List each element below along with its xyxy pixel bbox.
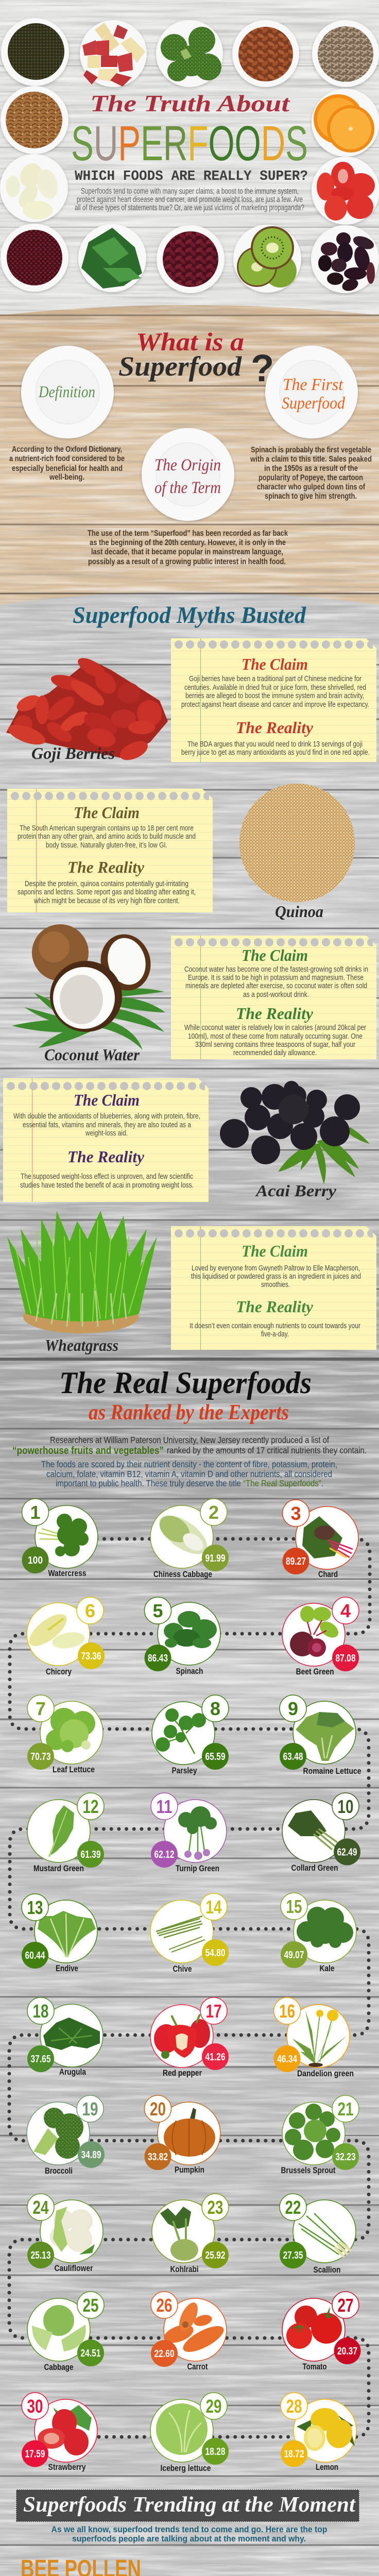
heading: What is a — [136, 327, 244, 356]
rank 8: parsley: Parsley — [172, 1766, 197, 1775]
heading: ? — [251, 347, 274, 389]
blue explanatory text — [41, 1459, 337, 1488]
rank 18: arugula: Arugula — [59, 2067, 86, 2077]
intro text: “powerhouse fruits and vegetables” — [12, 1445, 164, 1456]
bowl: orange slices — [312, 89, 379, 157]
heading — [118, 327, 274, 389]
rank 6: chicory — [24, 1597, 105, 1676]
rank 7: leaf lettuce: 7 — [36, 1698, 46, 1719]
food: turnip — [178, 1806, 217, 1860]
rank 24: cauliflower: 25.13 — [31, 2250, 50, 2261]
food: beet — [290, 1606, 341, 1657]
panel: hero — [0, 18, 379, 293]
rank 30: strawberry: 17.59 — [25, 2448, 45, 2460]
myth: goji berries — [6, 638, 376, 764]
rank 2: chinese cabbage — [150, 1499, 229, 1579]
rank 11: turnip green: 62.12 — [154, 1849, 174, 1860]
rank 11: turnip green: Turnip Green — [176, 1863, 219, 1873]
rank 19: broccoli — [27, 2095, 105, 2176]
rank 27: tomato: 27 — [338, 2295, 353, 2316]
rank 11: turnip green — [151, 1793, 227, 1873]
rank 22: scallion: 27.35 — [283, 2250, 303, 2261]
rank 22: scallion — [280, 2194, 356, 2275]
rank 21: brussels sprout: 32.23 — [336, 2151, 355, 2163]
note: acai claim and reality: With double the antioxidants of blueberries, along with protein, fibre, — [13, 1112, 200, 1121]
text: origin of the term — [88, 529, 288, 566]
intro text — [51, 2524, 328, 2544]
text: first superfood: spinach to give him strength. — [265, 492, 357, 501]
rank 29: iceberg lettuce: 18.28 — [205, 2446, 226, 2458]
rank 20: pumpkin — [144, 2095, 220, 2175]
food: kale — [297, 1907, 353, 1948]
rank 25: cabbage: 24.51 — [80, 2348, 101, 2359]
food: mustard leaf — [48, 1805, 74, 1857]
note: coconut claim and reality — [171, 936, 376, 1059]
heading: Superfood — [118, 351, 242, 382]
food: broccoli — [33, 2108, 83, 2159]
plate: origin of the term: The Origin — [154, 456, 221, 474]
subtitle: WHICH FOODS ARE REALLY SUPER? — [75, 169, 308, 184]
image: coconut — [12, 924, 165, 1050]
rank 3: chard — [282, 1500, 358, 1579]
note: acai claim and reality — [3, 1078, 209, 1202]
rank 8: parsley: 8 — [210, 1698, 220, 1719]
plate: origin of the term — [142, 428, 234, 521]
rank 30: strawberry — [22, 2393, 97, 2472]
rank 20: pumpkin: Pumpkin — [175, 2165, 204, 2175]
note: acai claim and reality: weight-loss aid. — [85, 1129, 128, 1138]
food: red pepper — [154, 2014, 210, 2059]
food: brussels sprouts — [285, 2104, 340, 2160]
myth: quinoa — [7, 784, 355, 921]
food: cabbage — [32, 2305, 86, 2351]
rank 1: watercress: 100 — [28, 1555, 43, 1566]
rank 6: chicory: Chicory — [46, 1667, 72, 1676]
rank 18: arugula: 37.65 — [31, 2054, 50, 2065]
panel: superfoods trending — [5, 2489, 373, 2576]
text: origin of the term: as the beginning of the 20th century. However, it is only in the — [90, 538, 286, 547]
rank 27: tomato: Tomato — [303, 2362, 326, 2371]
rank 21: brussels sprout — [281, 2095, 359, 2175]
note: quinoa claim and reality: saponins and lectins. Some report gas and bloating after eating it, — [18, 888, 196, 896]
rank 1: watercress: Watercress — [48, 1568, 87, 1578]
food: strawberries — [38, 2405, 92, 2455]
text: origin of the term: last decade, that it became popular in mainstream language, — [91, 548, 283, 556]
title: superfoods made of vegetables: SUPERFOODS — [71, 116, 308, 171]
note: coconut claim and reality: The Claim — [242, 946, 308, 964]
banner heading — [16, 2489, 359, 2522]
note: goji claim and reality: The Reality — [236, 718, 314, 737]
rank 28: lemon: 18.72 — [284, 2448, 304, 2460]
food: watercress — [38, 1514, 89, 1556]
rank 7: leaf lettuce: 70.73 — [31, 1751, 50, 1762]
plate: definition: Definition — [38, 382, 95, 401]
note: goji claim and reality — [171, 638, 376, 762]
note: acai claim and reality: studies have tested the benefit of acai in promoting weight loss. — [20, 1181, 194, 1190]
rank 29: iceberg lettuce: Iceberg lettuce — [161, 2463, 211, 2473]
rank 29: iceberg lettuce — [150, 2393, 229, 2473]
rank 15: kale: 49.07 — [284, 1950, 304, 1961]
note: wheatgrass claim and reality: The Claim — [242, 1242, 308, 1260]
rank 14: chive: 54.80 — [205, 1947, 226, 1959]
note: quinoa claim and reality: The Claim — [74, 803, 140, 822]
note: quinoa claim and reality: Despite the protein, quinoa contains potentially gut-irritating — [25, 879, 188, 888]
food: leaf lettuce — [46, 1708, 95, 1752]
rank 3: chard: 89.27 — [286, 1556, 306, 1567]
note: acai claim and reality: The supposed weight-loss effect is unproven, and few scientific — [21, 1172, 193, 1181]
food: chinese cabbage — [153, 1508, 214, 1562]
plate: origin of the term: of the Term — [154, 479, 221, 497]
text: definition: a nutrient-rich food considered to be — [9, 454, 125, 463]
rank 26: carrot: Carrot — [187, 2362, 208, 2371]
image: goji berries — [6, 654, 168, 764]
note: quinoa claim and reality: body tissue. Naturally gluten-free, it’s low GI. — [46, 841, 167, 850]
rank 21: brussels sprout: Brussels Sprout — [281, 2165, 336, 2175]
rank 10: collard green: 62.49 — [337, 1846, 357, 1858]
food: chicory — [24, 1608, 86, 1652]
panel: the real superfoods — [9, 1366, 370, 2473]
text: origin of the term: possibly as a result of a growing public interest in health food. — [88, 557, 286, 566]
intro text: protect against heart disease and cancer, and promote weight loss, are just a few. Are — [77, 195, 303, 204]
myth: wheatgrass — [7, 1211, 376, 1354]
intro text: superfoods people are talking about at the moment and why. — [72, 2534, 306, 2544]
rank 12: mustard green: Mustard Green — [33, 1863, 84, 1873]
rank 26: carrot: 26 — [157, 2295, 172, 2316]
heading — [59, 1366, 312, 1425]
rank 14: chive: Chive — [173, 1964, 192, 1974]
rank 13: endive: 60.44 — [25, 1950, 45, 1961]
rank 11: turnip green: 11 — [157, 1796, 172, 1817]
rank 6: chicory: 73.36 — [81, 1651, 101, 1662]
rank 4: beet green — [282, 1597, 359, 1676]
text: definition: especially beneficial for health and — [12, 464, 123, 473]
rank 9: romaine lettuce: Romaine Lettuce — [303, 1766, 361, 1776]
image: acai berries — [220, 1081, 370, 1184]
rank 5: spinach: 86.43 — [148, 1653, 168, 1664]
blue explanatory text: The foods are scored by their nutrient density - the content of fibre, potassium, protein, — [41, 1459, 337, 1469]
rank 2: chinese cabbage: 91.99 — [205, 1553, 226, 1564]
panel: superfood myths busted — [3, 602, 376, 1354]
food: cauliflower — [50, 2207, 95, 2255]
rank 30: strawberry: Strawberry — [48, 2462, 86, 2472]
bowl: kiwi slices — [233, 225, 301, 293]
bowl: garlic cloves — [0, 154, 68, 222]
note: wheatgrass claim and reality: five-a-day. — [261, 1330, 289, 1338]
rank 20: pumpkin: 33.82 — [148, 2151, 168, 2163]
food: chard — [302, 1516, 353, 1558]
rank 8: parsley — [152, 1695, 229, 1775]
rank 9: romaine lettuce: 9 — [288, 1698, 298, 1719]
rank 3: chard: 3 — [290, 1503, 301, 1524]
note: wheatgrass claim and reality: smoothies. — [261, 1280, 290, 1289]
rank 23: kohlrabi: 25.92 — [205, 2250, 226, 2261]
food: parsley — [156, 1708, 206, 1754]
food: scallion — [299, 2213, 351, 2257]
food: collard — [288, 1810, 337, 1850]
banner heading: Superfoods Trending at the Moment — [23, 2493, 356, 2517]
food: lemons — [297, 2408, 355, 2451]
rank 23: kohlrabi: Kohlrabi — [170, 2264, 199, 2274]
text: definition — [9, 445, 125, 482]
rank 12: mustard green — [27, 1793, 104, 1873]
bowl: spinach leaves — [78, 224, 146, 292]
bowl: bran — [312, 20, 379, 87]
rank 16: dandelion green: 16 — [279, 2001, 295, 2022]
rank 10: collard green: Collard Green — [291, 1863, 338, 1873]
bowl: pinto beans — [232, 20, 299, 87]
rank 1: watercress — [22, 1499, 98, 1578]
food: spinach — [164, 1611, 217, 1648]
note: quinoa claim and reality: The Reality — [67, 858, 145, 876]
rank 15: kale: 15 — [286, 1896, 302, 1917]
plate: first superfood: The First — [283, 376, 343, 394]
food: iceberg — [156, 2403, 208, 2455]
rank 25: cabbage: Cabbage — [44, 2362, 73, 2372]
bowl: adzuki beans — [1, 224, 68, 292]
intro text: all of these types of statements true? Or, are we just victims of marketing propaganda? — [75, 204, 304, 212]
rank 25: cabbage: 25 — [82, 2295, 99, 2316]
rank 4: beet green: 87.08 — [336, 1653, 355, 1664]
bowl: strawberries — [312, 157, 379, 225]
rank 9: romaine lettuce — [280, 1695, 361, 1776]
myth: acai berry — [3, 1078, 370, 1202]
rank 13: endive: Endive — [56, 1963, 78, 1973]
rank 23: kohlrabi: 23 — [207, 2197, 223, 2218]
rank 2: chinese cabbage: Chiness Cabbage — [153, 1569, 212, 1579]
image: wheatgrass — [7, 1211, 157, 1333]
rank 26: carrot — [151, 2292, 227, 2371]
intro text: As we all know, superfood trends tend to come and go. Here are the top — [51, 2524, 328, 2534]
rank 24: cauliflower: Cauliflower — [55, 2263, 93, 2273]
note: acai claim and reality: The Claim — [74, 1091, 140, 1109]
rank 15: kale — [281, 1893, 356, 1973]
rank 17: red pepper: 17 — [206, 2001, 221, 2022]
label: coconut water: Coconut Water — [44, 1045, 140, 1064]
rank 22: scallion: 22 — [285, 2197, 301, 2218]
text: definition: well-being. — [49, 473, 84, 482]
rank 20: pumpkin: 20 — [150, 2098, 166, 2120]
bowl: broccoli — [156, 20, 223, 87]
rank 29: iceberg lettuce: 29 — [206, 2396, 221, 2417]
note: quinoa claim and reality: which might be because of its very high fibre content. — [33, 896, 180, 905]
bowl: dark grapes — [311, 225, 379, 293]
text: first superfood: in the 1950s as a result of the — [264, 464, 358, 473]
rank 2: chinese cabbage: 2 — [209, 1502, 219, 1523]
note: acai claim and reality: essential fats, vitamins and minerals, they are also touted as a — [23, 1121, 192, 1129]
intro text: Researchers at William Paterson University, New Jersey recently produced a list of — [50, 1435, 329, 1445]
note: acai claim and reality: The Reality — [67, 1147, 145, 1166]
rank 24: cauliflower — [27, 2194, 103, 2273]
rank 9: romaine lettuce: 63.48 — [283, 1751, 303, 1762]
rank 28: lemon — [281, 2393, 356, 2472]
rank 30: strawberry: 30 — [27, 2396, 43, 2417]
rank 18: arugula — [27, 1997, 103, 2077]
rank 19: broccoli: Broccoli — [45, 2166, 73, 2176]
rank 27: tomato — [282, 2292, 360, 2371]
rank 19: broccoli: 34.89 — [81, 2149, 101, 2161]
blue explanatory text: important to public health. These truly deserve the title “The Real Superfoods”. — [56, 1478, 323, 1488]
note: coconut claim and reality: as a post-workout drink. — [243, 990, 309, 999]
blue explanatory text: calcium, folate, vitamin B12, vitamin A, vitamin D and other nutrients, all considered — [46, 1469, 332, 1479]
note: quinoa claim and reality: protein than any other grain, and amino acids to build muscle and — [18, 832, 196, 841]
rank 13: endive: 13 — [27, 1897, 43, 1918]
intro text: Superfoods tend to come with many super claims; a boost to the immune system, — [81, 187, 299, 196]
rank 10: collard green: 10 — [338, 1796, 353, 1817]
rank 14: chive: 14 — [206, 1896, 221, 1918]
rank 28: lemon: Lemon — [316, 2462, 338, 2472]
dotted connector path — [9, 1539, 370, 2437]
rank 5: spinach: Spinach — [176, 1666, 203, 1676]
text: definition: According to the Oxford Dictionary, — [12, 445, 122, 454]
rank 19: broccoli: 19 — [82, 2098, 98, 2120]
note: coconut claim and reality: recommended daily allowance. — [233, 1048, 317, 1057]
rank 1: watercress: 1 — [30, 1502, 41, 1523]
image: quinoa — [239, 784, 355, 902]
rank 7: leaf lettuce — [27, 1695, 103, 1774]
food: chive — [156, 1916, 205, 1952]
plate: definition — [21, 346, 114, 438]
rank 5: spinach: 5 — [152, 1600, 163, 1621]
food: pumpkin — [164, 2108, 215, 2157]
rank 15: kale: Kale — [319, 1963, 335, 1973]
rank 7: leaf lettuce: Leaf Lettuce — [53, 1765, 95, 1774]
plate: first superfood — [265, 346, 358, 438]
food: dandelion — [292, 2010, 347, 2067]
rank 12: mustard green: 61.39 — [80, 1849, 101, 1860]
rank 16: dandelion green: Dandelion green — [297, 2069, 354, 2078]
note: quinoa claim and reality — [7, 789, 213, 912]
rank 24: cauliflower: 24 — [33, 2197, 48, 2218]
heading: Superfood Myths Busted — [73, 602, 306, 628]
rank 4: beet green: Beet Green — [296, 1667, 334, 1676]
rank 10: collard green — [282, 1793, 360, 1873]
bowl: apple chunks — [80, 20, 147, 87]
intro text — [75, 187, 304, 212]
note: coconut claim and reality: The Reality — [236, 1004, 314, 1023]
rank 17: red pepper: Red pepper — [163, 2068, 202, 2078]
rank 28: lemon: 28 — [286, 2396, 302, 2417]
rank 23: kohlrabi — [152, 2194, 229, 2274]
rank 22: scallion: Scallion — [313, 2265, 341, 2275]
rank 16: dandelion green — [274, 1997, 354, 2078]
plate: first superfood: Superfood — [282, 394, 345, 413]
panel: what is a superfood — [9, 327, 372, 566]
label: goji berries: Goji Berries — [31, 744, 115, 762]
rank 3: chard: Chard — [318, 1569, 338, 1579]
food: kohlrabi — [160, 2207, 198, 2261]
heading: The Real Superfoods — [59, 1366, 312, 1400]
food: endive — [38, 1911, 96, 1957]
rank 12: mustard green: 12 — [82, 1796, 99, 1817]
label: quinoa: Quinoa — [275, 902, 323, 921]
rank 8: parsley: 65.59 — [205, 1751, 226, 1762]
bowl: walnuts — [1, 86, 68, 154]
rank 16: dandelion green: 46.34 — [277, 2054, 298, 2065]
food: tomatoes — [286, 2306, 342, 2349]
note: quinoa claim and reality: The South American supergrain contains up to 18 per cent more — [20, 824, 194, 833]
bowl: kidney beans — [157, 225, 225, 293]
note: wheatgrass claim and reality — [171, 1226, 376, 1350]
note: wheatgrass claim and reality: The Reality — [236, 1297, 314, 1316]
intro text — [12, 1435, 367, 1456]
rank 14: chive — [150, 1893, 229, 1974]
myth: coconut water — [12, 924, 376, 1064]
rank 13: endive — [22, 1894, 97, 1973]
rank 25: cabbage — [27, 2292, 104, 2372]
rank 5: spinach — [144, 1597, 220, 1676]
food: carrots — [162, 2300, 227, 2357]
rank 18: arugula: 18 — [33, 2001, 48, 2022]
rank 21: brussels sprout: 21 — [338, 2098, 353, 2120]
rank 6: chicory: 6 — [85, 1600, 95, 1621]
bowl: tea leaves — [1, 18, 69, 86]
note: goji claim and reality: The Claim — [242, 655, 308, 673]
title: The Truth About — [90, 90, 290, 116]
rank 17: red pepper: 41.26 — [205, 2052, 226, 2063]
food: romaine — [296, 1712, 354, 1761]
text: origin of the term: The use of the term “Superfood” has been recorded as far back — [88, 529, 288, 538]
rank 17: red pepper — [150, 1997, 229, 2078]
rank 26: carrot: 22.60 — [154, 2348, 174, 2360]
text: first superfood — [250, 446, 372, 501]
rank 27: tomato: 20.37 — [337, 2346, 357, 2357]
food: arugula — [43, 2018, 100, 2050]
rank 4: beet green: 4 — [340, 1600, 351, 1621]
label: acai berry: Acai Berry — [255, 1181, 337, 1200]
heading: as Ranked by the Experts — [89, 1401, 289, 1425]
label: wheatgrass: Wheatgrass — [45, 1336, 118, 1354]
